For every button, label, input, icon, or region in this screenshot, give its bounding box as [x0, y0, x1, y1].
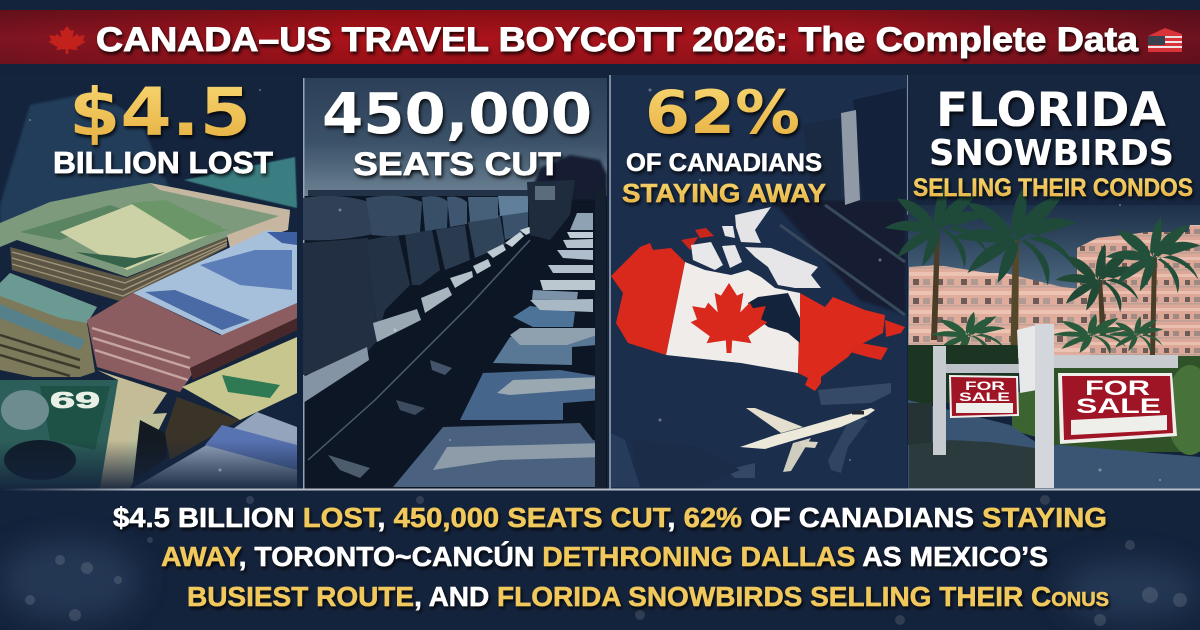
summary text: BUSIEST ROUTE, AND FLORIDA SNOWBIRDS SELLING THEIR CONUS [187, 581, 1109, 612]
map: Canada as a flag [611, 207, 905, 391]
summary text: $4.5 BILLION LOST, 450,000 SEATS CUT , 62% OF CANADIANS STAYING [113, 502, 1107, 533]
stat: $4.5 billion lost: $4.5 [69, 74, 251, 151]
land masses beneath the map [611, 383, 891, 487]
stat: 62% of Canadians staying away: STAYING AWAY [622, 178, 826, 208]
condo buildings [909, 225, 1200, 360]
palm trees [884, 184, 1200, 365]
for sale sign: large: FOR [1085, 377, 1150, 400]
icon: US flag [1148, 28, 1182, 52]
stat: $4.5 billion lost: BILLION LOST [53, 145, 273, 180]
stat: 450,000 seats cut: SEATS CUT [353, 146, 562, 182]
shrubs and ground [908, 345, 1200, 490]
stat: 62% of Canadians staying away [622, 78, 826, 208]
for sale sign: small: FOR [965, 379, 1006, 393]
seat backs [303, 196, 528, 375]
for sale sign: large [1017, 324, 1178, 488]
stat: Florida snowbirds selling their condos: SNOWBIRDS [929, 133, 1174, 174]
summary text: AWAY, TORONTO~CANCÚN DETHRONING DALLAS AS MEXICO’S [161, 541, 1048, 572]
stat: Florida snowbirds selling their condos: FLORIDA [936, 83, 1167, 138]
for sale sign: large: SALE [1076, 395, 1161, 418]
stat: 450,000 seats cut [322, 82, 592, 182]
icon: airplane [740, 408, 875, 472]
background seats [772, 88, 906, 315]
bill serial number: 69 [50, 387, 100, 413]
header banner [0, 10, 1200, 64]
panel: Florida condos and for-sale signs [884, 75, 1200, 490]
cushions on the far row [393, 180, 606, 488]
summary text [113, 502, 1109, 612]
panel: airplane seats, 450,000 seats cut [303, 78, 607, 489]
armrests [303, 224, 540, 478]
stat: $4.5 billion lost [53, 74, 273, 180]
panel: money, $4.5 billion lost [0, 75, 297, 490]
maple leaf [691, 283, 767, 353]
stat: Florida snowbirds selling their condos [913, 83, 1193, 202]
icon: Canadian maple leaf [48, 26, 86, 54]
title: CANADA–US TRAVEL BOYCOTT 2026: The Complete Data [96, 21, 1139, 59]
for sale sign: small: SALE [959, 390, 1010, 404]
panel: map of Canada, 62% staying away [609, 75, 908, 489]
stat: 62% of Canadians staying away: OF CANADIANS [626, 149, 822, 177]
stat: 62% of Canadians staying away: 62% [645, 78, 800, 148]
for sale sign: small [933, 346, 1022, 455]
stat: 450,000 seats cut: 450,000 [322, 82, 592, 147]
